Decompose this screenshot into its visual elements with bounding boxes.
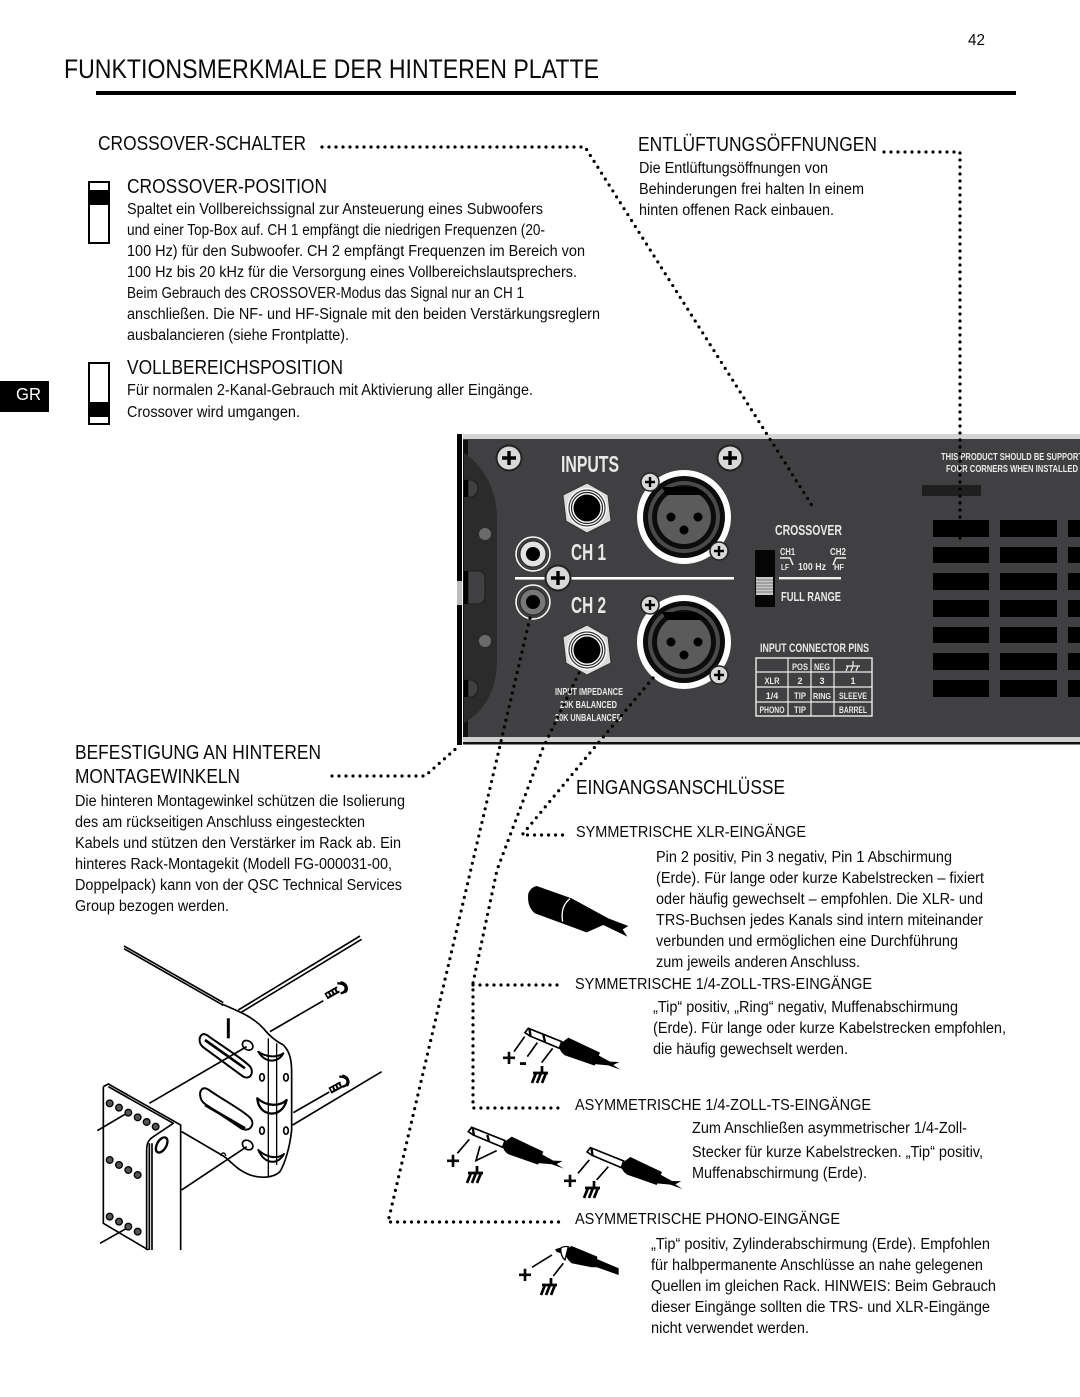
section: unbalanced TS inputs: Muffenabschirmung (Erde). xyxy=(692,1165,867,1182)
section: phono inputs: dieser Eingänge sollten die TRS- und XLR-Eingänge xyxy=(651,1299,990,1316)
section: crossover position: anschließen. Die NF- und HF-Signale mit den beiden Verstärkungsreglern xyxy=(127,306,600,323)
input labels: CH 2 xyxy=(571,592,606,618)
section: rear mounting brackets: Kabels und stützen den Verstärker im Rack ab. Ein xyxy=(75,835,401,852)
section: crossover position: CROSSOVER-POSITION xyxy=(127,175,327,198)
section: full range position: Crossover wird umgangen. xyxy=(127,404,300,421)
section: rear mounting brackets xyxy=(75,741,405,915)
section: balanced XLR inputs: TRS-Buchsen jedes Kanals sind intern miteinander xyxy=(656,912,983,929)
section: balanced TRS inputs: SYMMETRISCHE 1/4-ZOLL-TRS-EINGÄNGE xyxy=(575,976,872,993)
crossover switch on panel: CH1 xyxy=(780,546,795,558)
input labels: CH 1 xyxy=(571,539,606,565)
impedance text: 20K BALANCED xyxy=(560,700,617,711)
crossover switch on panel: CH2 xyxy=(830,546,846,558)
rear panel illustration xyxy=(457,434,1080,745)
section: phono inputs: nicht verwendet werden. xyxy=(651,1320,809,1337)
input connector pin table: PHONO xyxy=(760,705,784,715)
section: rear mounting brackets: Group bezogen werden. xyxy=(75,898,229,915)
section: unbalanced TS inputs xyxy=(575,1097,983,1182)
impedance text: 20K UNBALANCED xyxy=(555,713,622,724)
section: vents xyxy=(638,133,877,219)
input connector pin table: TIP xyxy=(794,691,806,701)
section: full range position: VOLLBEREICHSPOSITION xyxy=(127,356,343,379)
input connector pin table: 1 xyxy=(850,676,856,686)
section: balanced XLR inputs: SYMMETRISCHE XLR-EINGÄNGE xyxy=(576,824,806,841)
section: full range position: Für normalen 2-Kanal-Gebrauch mit Aktivierung aller Eingänge. xyxy=(127,382,533,399)
page number: 42 xyxy=(968,32,985,49)
input connector pin table xyxy=(756,643,872,716)
section: balanced TRS inputs: „Tip“ positiv, „Ring“ negativ, Muffenabschirmung xyxy=(653,999,958,1016)
section: rear mounting brackets: MONTAGEWINKELN xyxy=(75,765,240,788)
crossover switch on panel xyxy=(755,523,846,607)
input connector pin table: SLEEVE xyxy=(839,691,867,701)
section: phono inputs xyxy=(575,1211,996,1337)
input connector pin table: INPUT CONNECTOR PINS xyxy=(760,643,869,655)
input connector pin table: NEG xyxy=(814,662,830,672)
input connector pin table: RING xyxy=(813,691,831,701)
input connector pin table: 1/4 xyxy=(766,691,778,701)
section: crossover position: ausbalancieren (siehe Frontplatte). xyxy=(127,327,349,344)
crossover switch on panel: 100 Hz xyxy=(798,561,826,573)
title: FUNKTIONSMERKMALE DER HINTEREN PLATTE xyxy=(64,54,599,84)
crossover switch on panel: LF xyxy=(781,563,789,572)
input connector pin table: 2 xyxy=(797,676,803,686)
icon: switch in full range position xyxy=(89,363,109,424)
title rule xyxy=(96,91,1016,95)
corner screws xyxy=(496,446,742,470)
section: unbalanced TS inputs: Stecker für kurze Kabelstrecken. „Tip“ positiv, xyxy=(692,1144,983,1161)
section: vents: Behinderungen frei halten In einem xyxy=(639,181,864,198)
icon: TS plug with ring and sleeve joined xyxy=(446,1127,564,1183)
leader: crossover switch xyxy=(322,147,813,507)
channel divider xyxy=(515,566,734,590)
section: crossover position: und einer Top-Box auf. CH 1 empfängt die niedrigen Frequenzen (20- xyxy=(127,222,545,239)
language tab xyxy=(0,381,49,412)
section: balanced XLR inputs: oder häufig gewechselt – empfohlen. Die XLR- und xyxy=(656,891,983,908)
bracket illustration xyxy=(97,936,382,1250)
input connector pin table: BARREL xyxy=(839,705,867,715)
quarter-inch jacks xyxy=(563,483,611,675)
input connector pin table: POS xyxy=(792,662,808,672)
leader: vents xyxy=(884,152,960,545)
icon: phono plug xyxy=(518,1246,619,1295)
crossover switch on panel: FULL RANGE xyxy=(781,590,841,604)
section: balanced XLR inputs: (Erde). Für lange oder kurze Kabelstrecken – fixiert xyxy=(656,870,985,887)
ventilation slots xyxy=(933,520,1080,697)
heading: input connectors: EINGANGSANSCHLÜSSE xyxy=(576,776,785,799)
section: rear mounting brackets: BEFESTIGUNG AN HINTEREN xyxy=(75,741,321,764)
section: rear mounting brackets: des am rückseitigen Anschluss eingesteckten xyxy=(75,814,365,831)
section: balanced TRS inputs xyxy=(575,976,1006,1058)
heading: crossover switch: CROSSOVER-SCHALTER xyxy=(98,132,306,155)
section: balanced TRS inputs: (Erde). Für lange oder kurze Kabelstrecken empfohlen, xyxy=(653,1020,1006,1037)
section: balanced XLR inputs: Pin 2 positiv, Pin 3 negativ, Pin 1 Abschirmung xyxy=(656,849,952,866)
section: vents: Die Entlüftungsöffnungen von xyxy=(639,160,828,177)
icon: TS plug xyxy=(563,1148,682,1198)
icon: TRS plug: - xyxy=(519,1049,527,1076)
section: phono inputs: ASYMMETRISCHE PHONO-EINGÄNGE xyxy=(575,1211,840,1228)
section: full range position xyxy=(127,356,533,421)
rack ear xyxy=(457,453,497,723)
icon: TS plug: + xyxy=(563,1168,577,1195)
input labels xyxy=(561,451,619,618)
section: vents: ENTLÜFTUNGSÖFFNUNGEN xyxy=(638,133,877,156)
section: crossover position: 100 Hz bis 20 kHz für die Versorgung eines Vollbereichslautsprechers. xyxy=(127,264,577,281)
section: balanced TRS inputs: die häufig gewechselt werden. xyxy=(653,1041,848,1058)
section: phono inputs: für halbpermanente Anschlüsse an nahe gelegenen xyxy=(651,1257,983,1274)
impedance text: INPUT IMPEDANCE xyxy=(555,687,623,698)
section: rear mounting brackets: hinteres Rack-Montagekit (Modell FG-000031-00, xyxy=(75,856,392,873)
input connector pin table: TIP xyxy=(794,705,806,715)
phono jacks xyxy=(516,537,550,619)
leader: phono input xyxy=(388,618,560,1222)
section: phono inputs: „Tip“ positiv, Zylinderabschirmung (Erde). Empfohlen xyxy=(651,1236,990,1253)
section: unbalanced TS inputs: ASYMMETRISCHE 1/4-ZOLL-TS-EINGÄNGE xyxy=(575,1097,871,1114)
icon: phono plug: + xyxy=(518,1262,532,1289)
section: balanced XLR inputs: verbunden und ermöglichen eine Durchführung xyxy=(656,933,958,950)
leader: mounting brackets xyxy=(332,745,460,776)
input connector pin table: XLR xyxy=(764,676,780,686)
section: crossover position: Spaltet ein Vollbereichssignal zur Ansteuerung eines Subwoofers xyxy=(127,201,543,218)
leader: TRS and TS inputs xyxy=(473,673,579,1108)
section: crossover position: Beim Gebrauch des CROSSOVER-Modus das Signal nur an CH 1 xyxy=(127,285,524,302)
section: rear mounting brackets: Doppelpack) kann von der QSC Technical Services xyxy=(75,877,402,894)
icon: XLR plug xyxy=(528,886,628,937)
section: phono inputs: Quellen im gleichen Rack. HINWEIS: Beim Gebrauch xyxy=(651,1278,996,1295)
leader: XLR input xyxy=(522,678,653,835)
icon: TRS plug xyxy=(502,1028,620,1083)
XLR connectors xyxy=(637,470,731,689)
impedance text xyxy=(555,687,623,724)
section: crossover position: 100 Hz) für den Subwoofer. CH 2 empfängt Frequenzen im Bereich von xyxy=(127,243,585,260)
icon: TS plug with ring and sleeve joined: + xyxy=(446,1148,460,1175)
input connector pin table: 3 xyxy=(819,676,825,686)
section: crossover position xyxy=(127,175,600,344)
support warning xyxy=(922,451,1080,496)
crossover switch on panel: CROSSOVER xyxy=(775,523,842,539)
crossover switch on panel: HF xyxy=(834,563,844,572)
icon: TRS plug: + xyxy=(502,1045,516,1072)
language tab: GR xyxy=(16,384,41,404)
input labels: INPUTS xyxy=(561,451,619,477)
section: vents: hinten offenen Rack einbauen. xyxy=(639,202,834,219)
section: balanced XLR inputs xyxy=(576,824,985,971)
section: rear mounting brackets: Die hinteren Montagewinkel schützen die Isolierung xyxy=(75,793,405,810)
section: unbalanced TS inputs: Zum Anschließen asymmetrischer 1/4-Zoll- xyxy=(692,1120,967,1137)
icon: switch in crossover position xyxy=(89,182,109,243)
section: balanced XLR inputs: zum jeweils anderen Anschluss. xyxy=(656,954,860,971)
